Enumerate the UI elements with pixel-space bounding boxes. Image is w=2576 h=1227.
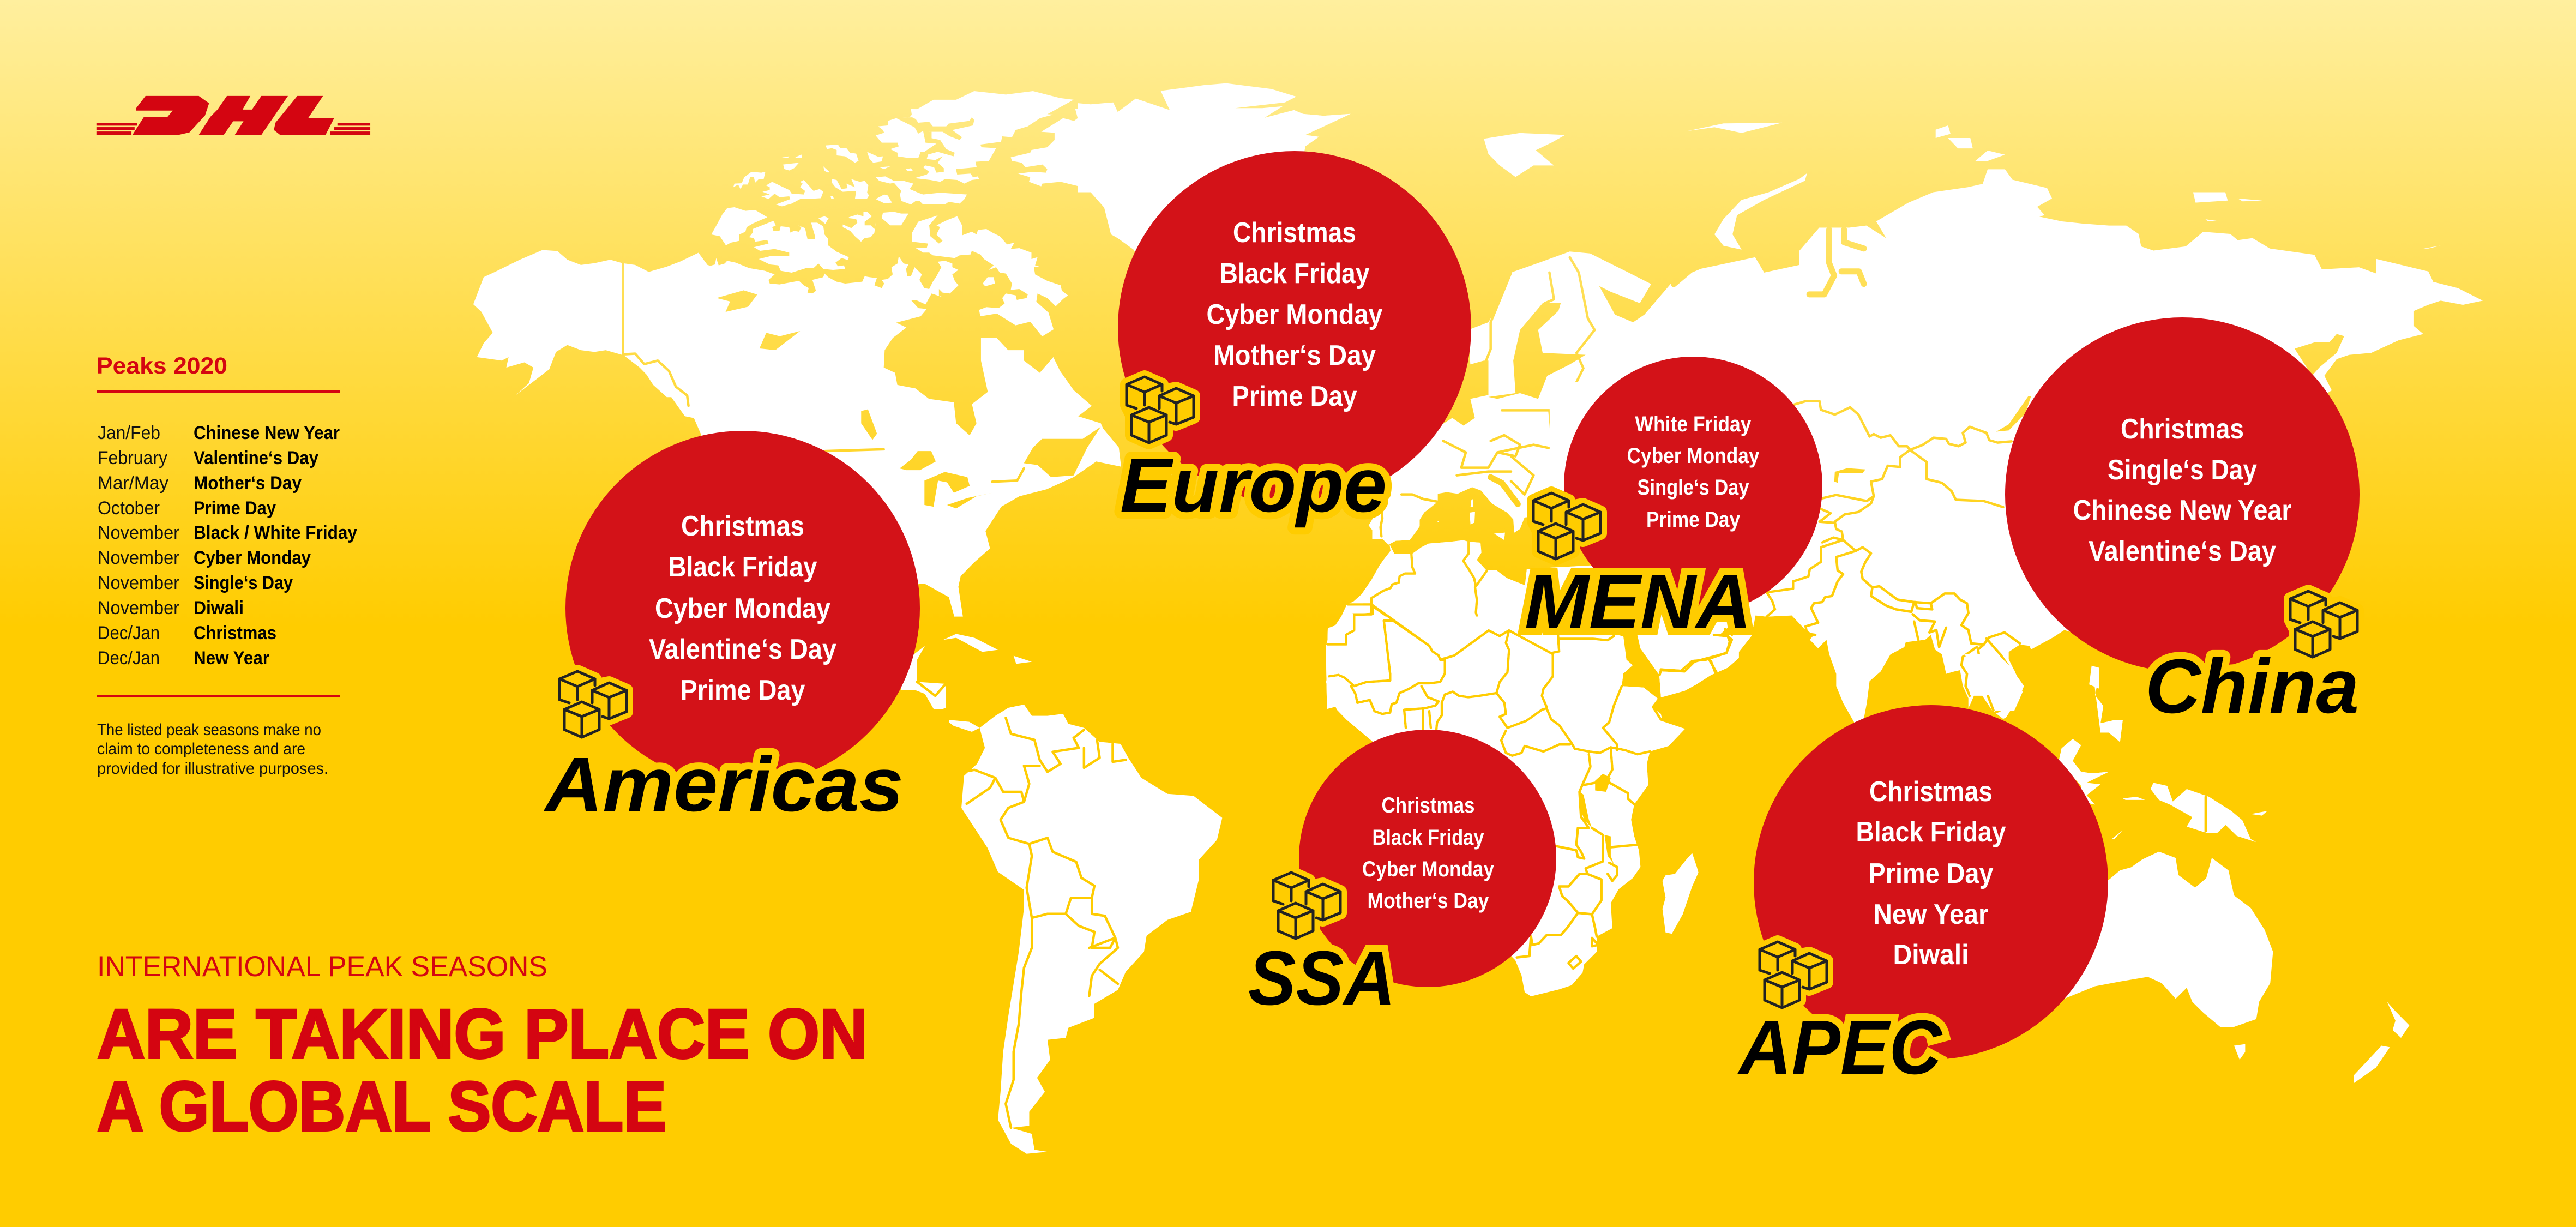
Americas peaks: Christmas xyxy=(681,510,804,542)
APEC label: APEC xyxy=(1737,1004,1943,1090)
map: Europe and Asia xyxy=(1309,82,2508,774)
main title xyxy=(97,995,868,1146)
disclaimer: provided for illustrative purposes. xyxy=(97,760,328,778)
panel: peaks 2020 list xyxy=(97,353,357,778)
icon: parcels xyxy=(559,671,627,737)
main title: ARE TAKING PLACE ON xyxy=(97,995,868,1073)
main title: A GLOBAL SCALE xyxy=(97,1068,666,1146)
MENA label: MENA xyxy=(1525,558,1752,645)
peak season calendar: Dec/Jan xyxy=(98,623,160,643)
peak season calendar: Chinese New Year xyxy=(194,423,340,443)
MENA peaks: Single‘s Day xyxy=(1637,476,1749,500)
logo letter L xyxy=(274,96,334,135)
MENA peaks: Prime Day xyxy=(1646,508,1741,532)
panel: China xyxy=(2005,317,2360,729)
peak season calendar: Mar/May xyxy=(98,473,168,494)
Europe peaks: Black Friday xyxy=(1219,258,1370,290)
Europe peaks: Prime Day xyxy=(1232,381,1357,412)
China peaks: Christmas xyxy=(2121,413,2244,445)
logo letter H xyxy=(198,96,288,135)
SSA peaks: Black Friday xyxy=(1372,826,1484,850)
peak season calendar: Cyber Monday xyxy=(194,548,311,568)
logo stripes left xyxy=(97,123,137,135)
Americas label: Americas xyxy=(544,741,904,827)
panel: Europe xyxy=(1118,151,1471,528)
MENA peaks: White Friday xyxy=(1635,412,1752,436)
map: Oceania xyxy=(2018,698,2409,1083)
APEC peaks: Diwali xyxy=(1893,939,1969,971)
peak season calendar: November xyxy=(98,573,179,593)
SSA label: SSA xyxy=(1248,935,1395,1021)
icon: parcels xyxy=(1760,942,1827,1008)
peak season calendar: Valentine‘s Day xyxy=(194,448,318,468)
Americas peaks xyxy=(649,510,836,706)
subtitle: INTERNATIONAL PEAK SEASONS xyxy=(97,951,547,983)
panel: APEC xyxy=(1737,705,2108,1090)
APEC peaks xyxy=(1856,776,2006,971)
Europe peaks: Cyber Monday xyxy=(1206,299,1383,330)
Europe peaks xyxy=(1206,217,1383,412)
peak season calendar: November xyxy=(98,598,179,618)
map: North America and Greenland xyxy=(469,82,1363,709)
China peaks: Valentine‘s Day xyxy=(2089,536,2276,567)
peak season calendar: Black / White Friday xyxy=(194,522,357,543)
panel: Americas xyxy=(544,431,920,827)
peak season calendar: November xyxy=(98,548,179,568)
map: South America xyxy=(949,703,1232,1162)
panel: SSA xyxy=(1248,730,1556,1021)
APEC peaks: Black Friday xyxy=(1856,816,2006,848)
icon: parcels xyxy=(2290,591,2357,657)
disclaimer: The listed peak seasons make no xyxy=(97,721,321,739)
peak season calendar: Mother‘s Day xyxy=(194,473,302,494)
APEC peaks: New Year xyxy=(1874,899,1988,930)
MENA peaks xyxy=(1627,412,1760,532)
China peaks xyxy=(2073,413,2291,567)
Europe label: Europe xyxy=(1120,442,1387,528)
peak season calendar: February xyxy=(98,448,167,468)
Americas peaks: Cyber Monday xyxy=(655,593,830,624)
China peaks: Chinese New Year xyxy=(2073,495,2291,526)
SSA peaks: Cyber Monday xyxy=(1362,857,1495,881)
China circle xyxy=(2005,317,2360,672)
logo letter D xyxy=(133,96,209,135)
world map xyxy=(469,82,2508,1167)
MENA peaks: Cyber Monday xyxy=(1627,444,1760,468)
peak season calendar xyxy=(98,423,357,669)
logo stripes right xyxy=(330,123,370,135)
Europe peaks: Christmas xyxy=(1233,217,1356,249)
peak season calendar: November xyxy=(98,522,179,543)
peak season calendar: Dec/Jan xyxy=(98,648,160,669)
icon: parcels xyxy=(1273,873,1340,939)
Europe circle xyxy=(1118,151,1471,504)
peak season calendar: Christmas xyxy=(194,623,276,643)
peak season calendar: October xyxy=(98,498,160,519)
peak season calendar: Diwali xyxy=(194,598,244,618)
SSA circle xyxy=(1299,730,1556,987)
DHL logo xyxy=(97,96,370,135)
APEC peaks: Prime Day xyxy=(1868,858,1994,889)
SSA peaks xyxy=(1362,793,1495,913)
APEC peaks: Christmas xyxy=(1869,776,1993,808)
Americas peaks: Valentine‘s Day xyxy=(649,634,836,665)
disclaimer xyxy=(97,721,328,778)
heading: peaks 2020: Peaks 2020 xyxy=(97,353,227,379)
China peaks: Single‘s Day xyxy=(2108,454,2257,486)
disclaimer: claim to completeness and are xyxy=(97,740,305,758)
title xyxy=(97,951,868,1146)
peak season calendar: Prime Day xyxy=(194,498,276,519)
Americas peaks: Prime Day xyxy=(681,675,805,706)
SSA peaks: Christmas xyxy=(1382,793,1474,817)
Americas peaks: Black Friday xyxy=(669,551,817,583)
APEC circle xyxy=(1754,705,2108,1060)
peak season calendar: New Year xyxy=(194,648,269,669)
peak season calendar: Jan/Feb xyxy=(98,423,160,443)
icon: parcels xyxy=(1127,377,1194,443)
panel: MENA xyxy=(1525,357,1822,645)
SSA peaks: Mother‘s Day xyxy=(1368,889,1489,913)
peak season calendar: Single‘s Day xyxy=(194,573,293,593)
Europe peaks: Mother‘s Day xyxy=(1213,340,1376,371)
MENA circle xyxy=(1564,357,1822,615)
Americas circle xyxy=(565,431,920,785)
China label: China xyxy=(2145,643,2359,729)
map: Africa xyxy=(1326,534,1799,996)
icon: parcels xyxy=(1533,493,1600,559)
